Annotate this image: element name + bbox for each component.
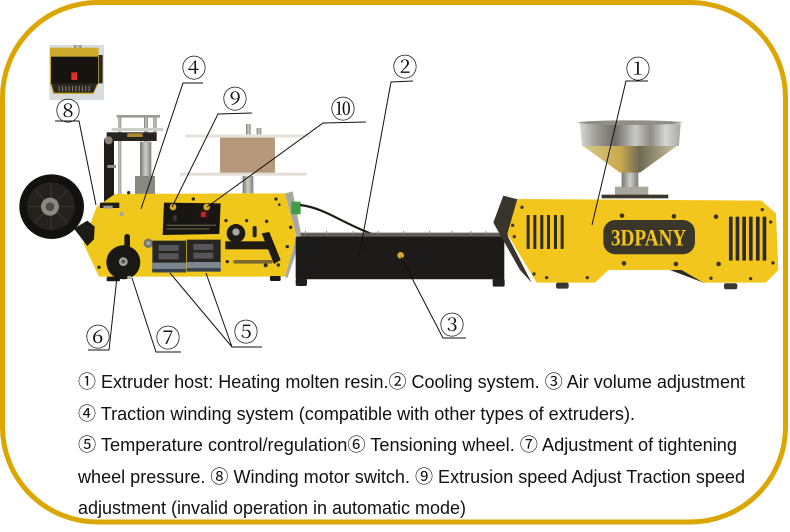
callout 5 [170,273,262,347]
description text block: wheel pressure. ⑧ Winding motor switch. ⑨ Extrusion speed Adjust Traction speed [77,467,745,487]
callout 1 [592,56,651,225]
right vents [729,217,766,261]
callout 2 [359,54,418,257]
callout 3 [401,257,466,340]
air volume knob [397,252,404,259]
side panel with green connector [285,191,302,278]
callout 7: ⑦ [155,325,181,353]
screws [511,206,775,280]
description text block: ① Extruder host: Heating molten resin.② Cooling system. ③ Air volume adjustment [78,372,745,392]
feet [107,276,281,281]
description text block: ④ Traction winding system (compatible with other types of extruders). [78,404,635,424]
callout 3: ③ [439,312,465,340]
guide columns and traction arm [104,115,163,226]
yellow extruder body [507,199,778,283]
callout 9 [172,86,252,207]
callout 2: ② [392,54,418,82]
small bracket on body [100,203,119,208]
feet [556,283,737,289]
yellow winder body [83,193,297,277]
base shadow [670,270,705,283]
logo badge [603,220,695,254]
callout 4 [141,55,207,209]
callout 9: ⑨ [222,86,248,114]
left vents [527,215,564,249]
description text block: ⑤ Temperature control/regulation⑥ Tensioning wheel. ⑦ Adjustment of tightening [78,435,737,455]
extruder host [493,120,778,289]
callout 4: ④ [181,55,207,83]
callout 7 [132,278,181,353]
callout 6: ⑥ [85,324,111,352]
callout 5: ⑤ [233,319,259,347]
spool [180,124,310,193]
tension wheel [106,234,153,279]
tensioner arm assembly [225,224,281,264]
top plate [602,195,668,198]
logo text: 3DPANY [611,225,686,251]
description text block: adjustment (invalid operation in automatic mode) [78,498,466,518]
control panel with knobs [163,203,221,235]
hopper funnel [578,120,682,195]
callout 8: ⑧ [55,98,81,126]
dark side plate [493,196,532,283]
band on arm [103,206,113,209]
callout 8 [55,98,96,205]
screws [97,191,292,269]
cooling system box [296,231,505,287]
inset photo: winding motor switch [49,45,104,100]
cable between winder and cooling box [300,205,372,234]
callout 6 [85,277,117,352]
callout 1: ① [625,56,651,84]
temperature controllers [152,240,221,272]
description text block [77,372,745,518]
large filament wheel [19,174,95,246]
callout 10: ⑩ [330,96,356,124]
callout 10 [207,96,366,207]
traction winding machine [19,115,310,281]
